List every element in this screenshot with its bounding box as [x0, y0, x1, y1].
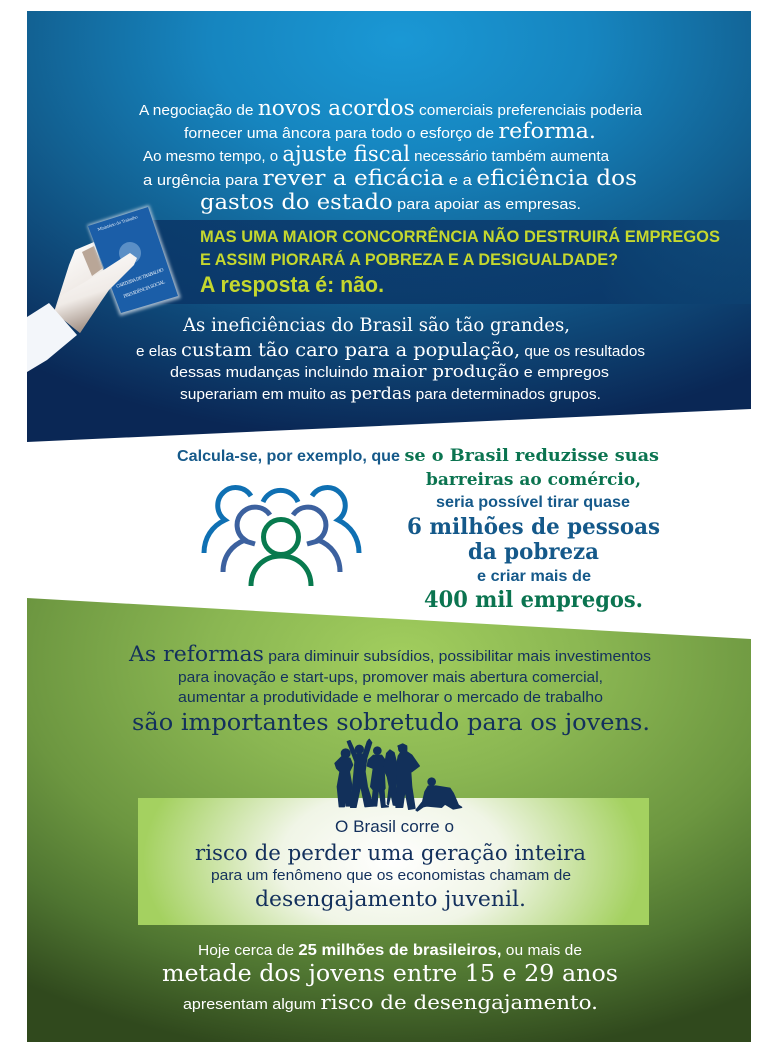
text block: reforms paragraph: As reformas para diminuir subsídios, possibilitar mais investimentos	[128, 642, 651, 666]
panel: blue top section	[27, 11, 751, 442]
text block: inefficiencies paragraph: superariam em muito as perdas para determinados grupos.	[180, 384, 601, 404]
text block: inefficiencies paragraph	[136, 314, 645, 404]
work card: CARTEIRA DE TRABALHO	[116, 267, 165, 290]
text block: inefficiencies paragraph: dessas mudanças incluindo maior produção e empregos	[170, 362, 609, 382]
text block: poverty statistics	[177, 446, 660, 613]
icon: youth silhouettes	[335, 739, 462, 811]
text block: trade agreements paragraph: Ao mesmo tempo, o ajuste fiscal necessário também aumenta	[143, 142, 610, 166]
text block: inefficiencies paragraph: As ineficiências do Brasil são tão grandes,	[182, 314, 570, 336]
callout band: question and answer	[153, 220, 751, 304]
text block: reforms paragraph: são importantes sobretudo para os jovens.	[132, 710, 650, 736]
text block: poverty statistics: 400 mil empregos.	[424, 587, 643, 613]
text block: trade agreements paragraph	[139, 96, 643, 214]
text block: poverty statistics: barreiras ao comércio,	[426, 470, 641, 490]
panel: light risk box: para um fenômeno que os economistas chamam de	[211, 867, 571, 884]
panel: light risk box: risco de perder uma geração inteira	[195, 841, 586, 865]
text block: poverty statistics: Calcula-se, por exemplo, que se o Brasil reduzisse suas	[177, 446, 659, 466]
work card: Ministério do Trabalho	[97, 214, 139, 232]
text block: trade agreements paragraph: a urgência para rever a eficácia e a eficiência dos	[143, 166, 637, 190]
work card	[87, 205, 181, 316]
callout band: question and answer: A resposta é: não.	[200, 272, 384, 297]
icon: hand holding work card	[27, 205, 181, 372]
text block: trade agreements paragraph: gastos do estado para apoiar as empresas.	[200, 190, 581, 214]
panel: light risk box	[138, 798, 649, 925]
text block: poverty statistics: 6 milhões de pessoas	[407, 514, 660, 540]
work card: PREVIDÊNCIA SOCIAL	[122, 277, 166, 300]
text block: trade agreements paragraph: A negociação de novos acordos comerciais preferenciais poderia	[139, 96, 643, 120]
text block: disengagement statistics: Hoje cerca de 25 milhões de brasileiros, ou mais de	[198, 942, 582, 959]
panel: green bottom section	[27, 598, 751, 1042]
callout band: question and answer: MAS UMA MAIOR CONCORRÊNCIA NÃO DESTRUIRÁ EMPREGOS	[200, 226, 720, 246]
text block: trade agreements paragraph: fornecer uma âncora para todo o esforço de reforma.	[184, 119, 596, 143]
text block: disengagement statistics	[162, 942, 618, 1014]
text block: disengagement statistics: metade dos jovens entre 15 e 29 anos	[162, 961, 618, 987]
text block: reforms paragraph: para inovação e start-ups, promover mais abertura comercial,	[178, 669, 603, 686]
text block: poverty statistics: da pobreza	[468, 539, 599, 565]
text block: disengagement statistics: apresentam algum risco de desengajamento.	[183, 990, 598, 1014]
callout band: question and answer: E ASSIM PIORARÁ A POBREZA E A DESIGUALDADE?	[200, 250, 618, 269]
panel: light risk box: desengajamento juvenil.	[255, 887, 526, 911]
text block: poverty statistics: e criar mais de	[477, 568, 591, 585]
icon: group of people	[204, 488, 359, 586]
text block: reforms paragraph	[128, 642, 651, 736]
text block: inefficiencies paragraph: e elas custam tão caro para a população, que os resultados	[136, 339, 645, 361]
panel: light risk box: O Brasil corre o	[335, 817, 454, 836]
text block: reforms paragraph: aumentar a produtividade e melhorar o mercado de trabalho	[178, 689, 603, 706]
text block: poverty statistics: seria possível tirar quase	[436, 494, 630, 511]
